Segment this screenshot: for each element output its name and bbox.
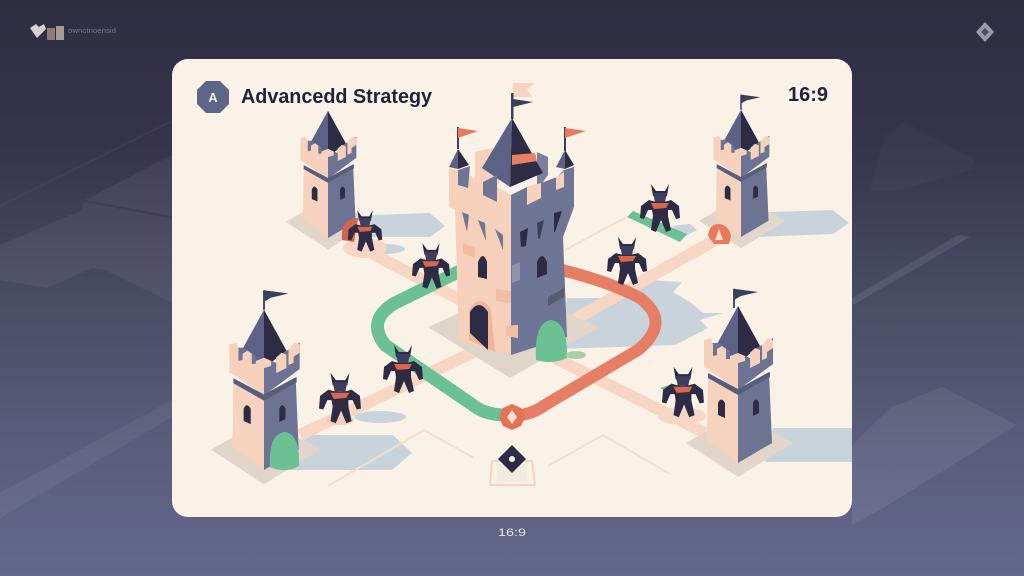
red route xyxy=(510,270,656,416)
top-left logo xyxy=(30,24,116,40)
badge xyxy=(197,81,229,113)
green route xyxy=(377,270,505,415)
tower: bottom left xyxy=(211,290,320,484)
ground shadows xyxy=(270,210,852,470)
tower: central keep xyxy=(428,83,600,378)
tower: top left xyxy=(286,111,373,249)
green bush: bottom left xyxy=(270,432,299,470)
bottom caption: 16:9 xyxy=(498,527,526,539)
bottom book and diamond icon xyxy=(490,445,535,485)
peach paths xyxy=(300,228,722,442)
thin route lines xyxy=(328,218,670,486)
panel: strategy map xyxy=(172,59,852,517)
badge: A xyxy=(208,90,218,105)
top-right logo icon xyxy=(976,22,994,42)
tower: top right xyxy=(699,95,786,248)
aspect ratio label: 16:9 xyxy=(788,84,828,106)
green bush: central xyxy=(536,320,586,362)
green pad xyxy=(627,211,687,242)
enemy units xyxy=(319,184,704,423)
route junction node xyxy=(499,404,525,430)
map marker pin xyxy=(708,224,731,244)
title: Advancedd Strategy xyxy=(241,86,433,108)
top-left logo: ownctnoensid xyxy=(68,28,116,35)
tower: bottom right xyxy=(686,289,793,477)
